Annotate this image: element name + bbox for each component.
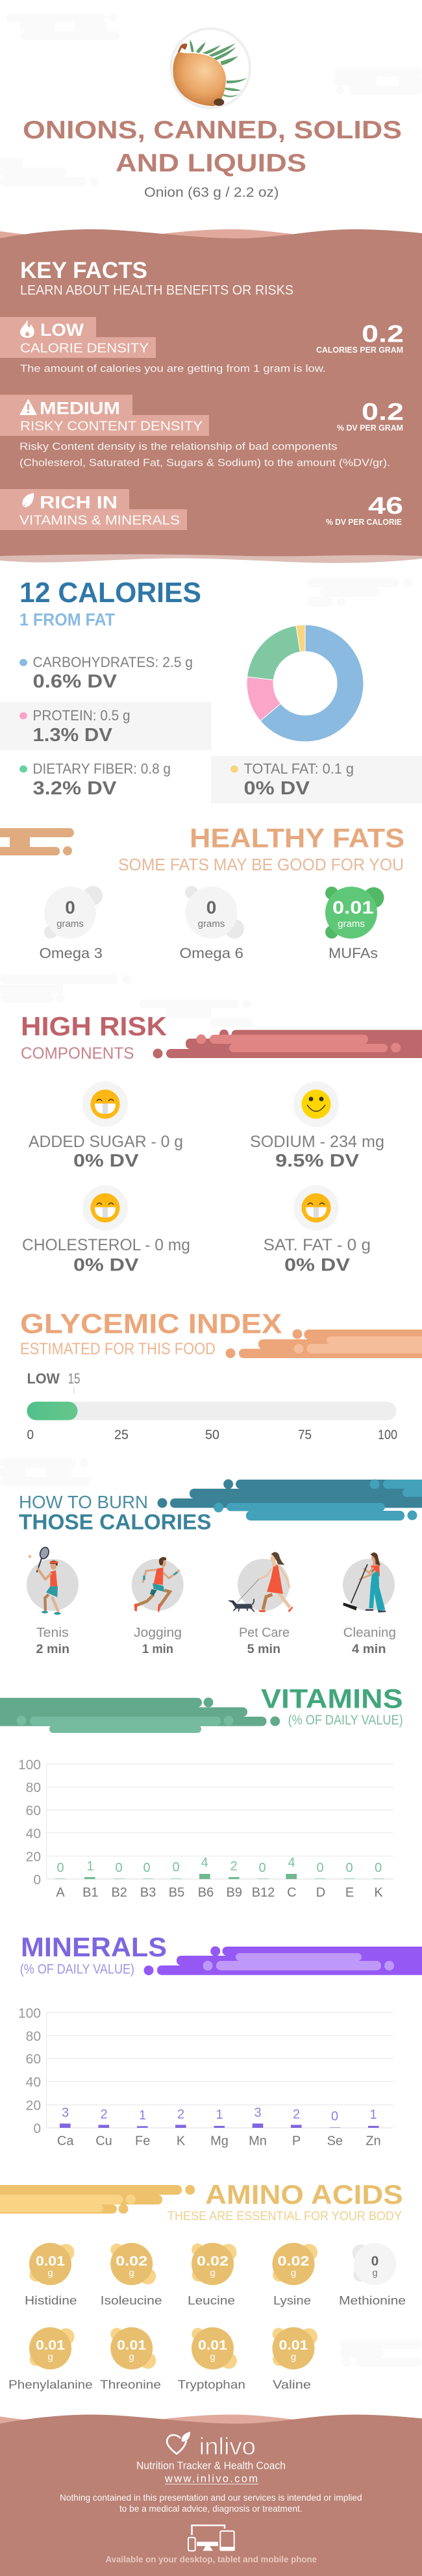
fat: omega 6: Omega 6 — [179, 945, 243, 961]
bar chart: minerals: 1 — [216, 2108, 223, 2122]
activity labels: Tenis — [36, 1626, 69, 1640]
heading: calories — [19, 577, 201, 629]
bar chart: vitamins: 0 — [316, 1861, 324, 1875]
fat: omega 3: grams — [56, 918, 84, 929]
fat: omega 3: Omega 3 — [39, 945, 103, 961]
key facts heading — [20, 258, 293, 297]
activity: jogging — [132, 1557, 184, 1613]
amino acid: histidine — [25, 2243, 77, 2307]
amino acid: histidine: 0.01 — [36, 2254, 65, 2269]
icon: inlivo heart logo — [167, 2432, 190, 2454]
bar chart: vitamins: 0 — [375, 1861, 382, 1875]
bar chart: minerals: 3 — [254, 2106, 262, 2120]
fat: omega 3 — [39, 886, 103, 961]
amino acid: methionine: 0 — [371, 2254, 379, 2269]
fact: medium risky content density: Risky Content density is the relationship of bad components — [19, 442, 338, 453]
bar chart: vitamins — [18, 1758, 393, 1900]
panel: key facts — [0, 229, 422, 563]
title — [23, 116, 402, 177]
amino acid: threonine: g — [129, 2351, 134, 2363]
risk: cholesterol — [22, 1185, 190, 1274]
glycemic index gauge — [27, 1370, 397, 1443]
amino acid: tryptophan: Tryptophan — [178, 2378, 245, 2392]
amino acid: leucine — [188, 2243, 236, 2307]
fat: omega 6: grams — [198, 918, 225, 929]
bar chart: minerals: K — [177, 2134, 186, 2149]
activity: pet care — [228, 1552, 293, 1612]
amino acid: methionine: Methionine — [339, 2293, 406, 2307]
heading: amino acids: THESE ARE ESSENTIAL FOR YOUR BODY — [168, 2210, 402, 2223]
glycemic index gauge: 0 — [27, 1428, 34, 1443]
fact: medium risky content density — [0, 395, 404, 469]
nutrient row: protein: 1.3% DV — [32, 725, 113, 746]
nutrient row: dietary fiber: 3.2% DV — [32, 778, 117, 799]
heading: high risk: HIGH RISK — [21, 1011, 167, 1041]
amino acid: phenylalanine: Phenylalanine — [8, 2378, 93, 2392]
glycemic index gauge: 75 — [298, 1428, 312, 1443]
heading: how to burn those calories — [19, 1492, 212, 1534]
amino acid: valine: Valine — [273, 2378, 311, 2392]
disclaimer: to be a medical advice, diagnosis or treatment. — [119, 2503, 303, 2514]
heading: healthy fats: SOME FATS MAY BE GOOD FOR YOU — [118, 855, 404, 874]
glycemic index gauge: 15 — [68, 1370, 81, 1387]
fact: low calorie density: CALORIE DENSITY — [20, 340, 149, 356]
icon: devices — [188, 2525, 235, 2551]
amino acid: tryptophan: 0.01 — [198, 2338, 227, 2353]
heading: high risk: COMPONENTS — [21, 1044, 134, 1063]
activity: tennis — [27, 1546, 79, 1615]
band: minerals decoration — [144, 1946, 422, 1975]
bar chart: vitamins: A — [56, 1886, 65, 1900]
activity: cleaning — [343, 1552, 395, 1613]
nutrient row: total fat: TOTAL FAT: 0.1 g — [244, 761, 354, 777]
band: amino acids decoration — [0, 2185, 195, 2214]
fact: rich in vitamins and minerals: RICH IN — [40, 493, 118, 512]
amino acid: histidine: g — [47, 2267, 53, 2279]
amino acid: valine — [273, 2327, 317, 2392]
fact: medium risky content density: (Cholesterol, Saturated Fat, Sugars & Sodium) to the amount (%DV/gr). — [19, 458, 390, 469]
fat: MUFAs: 0.01 — [332, 898, 374, 917]
amino acid: lysine — [273, 2243, 317, 2307]
risk: cholesterol: CHOLESTEROL - 0 mg — [22, 1236, 190, 1254]
nutrient row: total fat — [211, 756, 422, 803]
heading: glycemic index — [20, 1308, 282, 1358]
bar chart: vitamins: 20 — [26, 1850, 41, 1864]
heading: glycemic index: GLYCEMIC INDEX — [20, 1308, 282, 1339]
heading: how to burn those calories: THOSE CALORIES — [19, 1509, 212, 1534]
activity labels: 4 min — [352, 1643, 386, 1656]
footer website link: www.inlivo.com — [164, 2473, 258, 2485]
fact: low calorie density: LOW — [40, 320, 84, 340]
fact: medium risky content density: % DV PER GRAM — [337, 423, 403, 433]
bar chart: minerals: Mg — [210, 2134, 229, 2149]
bar chart: vitamins: 0 — [345, 1861, 353, 1875]
activity labels: Jogging — [134, 1626, 182, 1640]
fact: low calorie density: The amount of calories you are getting from 1 gram is low. — [20, 364, 326, 374]
fact: rich in vitamins and minerals: % DV PER CALORIE — [326, 517, 402, 527]
bar chart: minerals: 20 — [26, 2098, 41, 2114]
bar chart: minerals: 2 — [293, 2107, 300, 2121]
amino acid: valine: 0.01 — [279, 2338, 308, 2353]
fact: medium risky content density: 0.2 — [362, 399, 404, 425]
amino acid: valine: g — [291, 2351, 296, 2363]
band: healthy fats decoration — [0, 828, 74, 855]
bar chart: minerals: Zn — [366, 2134, 381, 2149]
heading: calories: 1 FROM FAT — [19, 610, 115, 629]
bar chart: minerals: 60 — [26, 2052, 41, 2067]
bar chart: vitamins: 2 — [230, 1859, 238, 1873]
risk: saturated fat: SAT. FAT - 0 g — [264, 1236, 371, 1254]
bar chart: minerals: 100 — [18, 2006, 41, 2021]
fact: rich in vitamins and minerals: VITAMINS & MINERALS — [19, 513, 180, 527]
risk: sodium — [250, 1081, 384, 1170]
donut chart: calories breakdown — [247, 625, 364, 742]
bar chart: vitamins: 0 — [33, 1873, 41, 1888]
bar chart: vitamins: B5 — [169, 1886, 184, 1900]
band: high risk decoration — [153, 1029, 422, 1059]
fact: low calorie density: 0.2 — [362, 321, 404, 347]
bar chart: vitamins: 0 — [56, 1861, 64, 1875]
amino acid: lysine: 0.02 — [278, 2254, 309, 2269]
amino acid: tryptophan: g — [210, 2351, 216, 2363]
nutrient row: dietary fiber: DIETARY FIBER: 0.8 g — [32, 761, 171, 777]
bar chart: minerals: 2 — [100, 2107, 108, 2121]
heading: glycemic index: ESTIMATED FOR THIS FOOD — [20, 1340, 216, 1358]
amino acid: isoleucine: g — [129, 2267, 134, 2279]
title: ONIONS, CANNED, SOLIDS — [23, 116, 402, 144]
footer availability note: Available on your desktop, tablet and mobile phone — [105, 2554, 317, 2564]
key facts heading: KEY FACTS — [20, 258, 147, 283]
risk: saturated fat: 0% DV — [284, 1255, 350, 1274]
bar chart: vitamins: B6 — [198, 1886, 214, 1900]
bar chart: vitamins: D — [316, 1886, 325, 1900]
amino acid: threonine: Threonine — [100, 2378, 161, 2392]
fact: low calorie density — [0, 317, 404, 374]
bar chart: vitamins: 0 — [172, 1860, 180, 1875]
amino acid: leucine: 0.02 — [197, 2254, 229, 2269]
band: burn calories decoration — [157, 1480, 422, 1521]
bar chart: vitamins: B1 — [82, 1886, 99, 1900]
bar chart: vitamins: K — [374, 1886, 383, 1900]
heading: vitamins — [261, 1684, 403, 1728]
logo wordmark: inlivo — [199, 2433, 256, 2460]
heading: amino acids: AMINO ACIDS — [205, 2179, 403, 2210]
glycemic index gauge: 100 — [378, 1428, 397, 1443]
bar chart: minerals: 2 — [177, 2107, 184, 2121]
nutrient row: carbohydrates: 0.6% DV — [32, 672, 118, 692]
risk: added sugar: ADDED SUGAR - 0 g — [29, 1133, 183, 1151]
bar chart: vitamins: B9 — [226, 1886, 242, 1900]
bar chart: minerals: 0 — [331, 2110, 338, 2124]
heading: healthy fats — [118, 822, 404, 874]
bar chart: minerals: 40 — [26, 2075, 41, 2090]
risk: sodium: SODIUM - 234 mg — [250, 1133, 384, 1151]
bar chart: vitamins: 80 — [26, 1780, 41, 1795]
glycemic index gauge: LOW — [27, 1370, 60, 1387]
fact: medium risky content density: RISKY CONTENT DENSITY — [20, 418, 203, 434]
amino acid: leucine: g — [210, 2267, 216, 2279]
nutrient row: protein: PROTEIN: 0.5 g — [32, 707, 130, 724]
amino acid: phenylalanine — [8, 2327, 93, 2392]
bar chart: vitamins: 100 — [18, 1758, 41, 1773]
fat: omega 3: 0 — [65, 898, 75, 917]
heading: vitamins: VITAMINS — [261, 1684, 403, 1713]
band: glycemic index decoration — [226, 1329, 422, 1358]
heading: minerals — [20, 1932, 167, 1977]
amino acid: phenylalanine: 0.01 — [36, 2338, 65, 2353]
key facts heading: LEARN ABOUT HEALTH BENEFITS OR RISKS — [20, 283, 293, 297]
serving size subtitle: Onion (63 g / 2.2 oz) — [144, 185, 279, 200]
fact: medium risky content density: MEDIUM — [40, 399, 120, 418]
glycemic index gauge: 25 — [114, 1428, 129, 1443]
activity labels: 5 min — [247, 1643, 280, 1656]
amino acid: isoleucine: Isoleucine — [101, 2293, 162, 2307]
panel: footer — [0, 2415, 422, 2576]
glycemic index gauge: 50 — [205, 1428, 219, 1443]
heading: minerals: MINERALS — [21, 1932, 167, 1962]
bar chart: minerals: Fe — [135, 2134, 150, 2149]
amino acid: lysine: Lysine — [273, 2293, 311, 2307]
bar chart: minerals: 0 — [33, 2121, 41, 2136]
amino acid: methionine — [339, 2243, 406, 2307]
bar chart: vitamins: 1 — [86, 1859, 94, 1873]
bar chart: minerals: 1 — [139, 2108, 146, 2123]
amino acid: lysine: g — [291, 2267, 296, 2279]
bar chart: vitamins: 0 — [258, 1861, 266, 1875]
bar chart: minerals: Se — [327, 2134, 343, 2149]
bar chart: vitamins: E — [345, 1886, 354, 1900]
activity labels: 1 min — [142, 1643, 173, 1656]
bar chart: vitamins: 4 — [288, 1856, 295, 1870]
amino acid: threonine: 0.01 — [117, 2338, 147, 2353]
bar chart: vitamins: B12 — [252, 1886, 275, 1900]
bar chart: minerals: 80 — [26, 2029, 41, 2044]
fat: MUFAs — [325, 887, 384, 961]
bar chart: vitamins: 60 — [26, 1803, 41, 1819]
title: AND LIQUIDS — [116, 149, 306, 177]
heading: high risk — [21, 1011, 167, 1063]
activity labels: 2 min — [36, 1643, 69, 1656]
bar chart: minerals: Cu — [95, 2134, 112, 2149]
amino acid: leucine: Leucine — [188, 2293, 235, 2307]
heading: calories: 12 CALORIES — [19, 577, 201, 609]
amino acid: tryptophan — [178, 2327, 245, 2392]
heading: healthy fats: HEALTHY FATS — [190, 822, 404, 853]
risk: added sugar: 0% DV — [73, 1150, 139, 1170]
fat: MUFAs: MUFAs — [329, 945, 378, 961]
amino acid: isoleucine — [101, 2243, 162, 2307]
fact: rich in vitamins and minerals — [0, 489, 403, 530]
risk: saturated fat — [264, 1185, 371, 1274]
bar chart: minerals: 1 — [369, 2108, 377, 2122]
bar chart: minerals — [18, 2006, 393, 2149]
bar chart: vitamins: 40 — [26, 1826, 41, 1841]
footer tagline: Nutrition Tracker & Health Coach — [136, 2460, 286, 2471]
band: vitamins decoration — [0, 1698, 280, 1733]
nutrient row: total fat: 0% DV — [244, 778, 310, 799]
risk: added sugar — [29, 1081, 183, 1170]
fat: omega 6: 0 — [206, 898, 216, 917]
bar chart: vitamins: B3 — [140, 1886, 156, 1900]
fact: low calorie density: CALORIES PER GRAM — [316, 345, 403, 355]
bar chart: minerals: Mn — [249, 2134, 267, 2149]
activity labels: Pet Care — [239, 1626, 290, 1640]
fat: omega 6 — [179, 886, 244, 961]
bar chart: vitamins: 0 — [115, 1861, 123, 1875]
amino acid: histidine: Histidine — [25, 2293, 77, 2307]
bar chart: vitamins: C — [287, 1886, 297, 1900]
heading: amino acids — [168, 2179, 403, 2223]
fat: MUFAs: grams — [338, 918, 365, 929]
amino acid: phenylalanine: g — [47, 2351, 53, 2363]
icon: onion photo — [171, 29, 250, 108]
bar chart: minerals: 3 — [62, 2106, 69, 2120]
heading: minerals: (% OF DAILY VALUE) — [20, 1962, 134, 1977]
bar chart: minerals: P — [292, 2134, 301, 2149]
activity labels — [36, 1626, 396, 1656]
bar chart: vitamins: B2 — [111, 1886, 127, 1900]
nutrient row: protein — [0, 702, 212, 750]
amino acid: methionine: g — [372, 2267, 378, 2279]
activity labels: Cleaning — [343, 1626, 396, 1640]
disclaimer: Nothing contained in this presentation and our services is intended or implied — [60, 2492, 362, 2503]
nutrient row: dietary fiber — [19, 761, 171, 799]
amino acid: isoleucine: 0.02 — [116, 2254, 147, 2269]
nutrient row: carbohydrates — [19, 654, 193, 692]
heading: vitamins: (% OF DAILY VALUE) — [288, 1713, 403, 1728]
amino acid: threonine — [100, 2327, 161, 2392]
bar chart: vitamins: 4 — [201, 1856, 208, 1870]
bar chart: minerals: Ca — [57, 2134, 74, 2149]
bar chart: vitamins: 0 — [143, 1861, 151, 1875]
heading: how to burn those calories: HOW TO BURN — [19, 1492, 148, 1512]
nutrient row: carbohydrates: CARBOHYDRATES: 2.5 g — [32, 654, 193, 670]
risk: cholesterol: 0% DV — [73, 1255, 139, 1274]
fact: rich in vitamins and minerals: 46 — [368, 492, 403, 519]
disclaimer — [60, 2492, 362, 2514]
risk: sodium: 9.5% DV — [275, 1150, 359, 1170]
